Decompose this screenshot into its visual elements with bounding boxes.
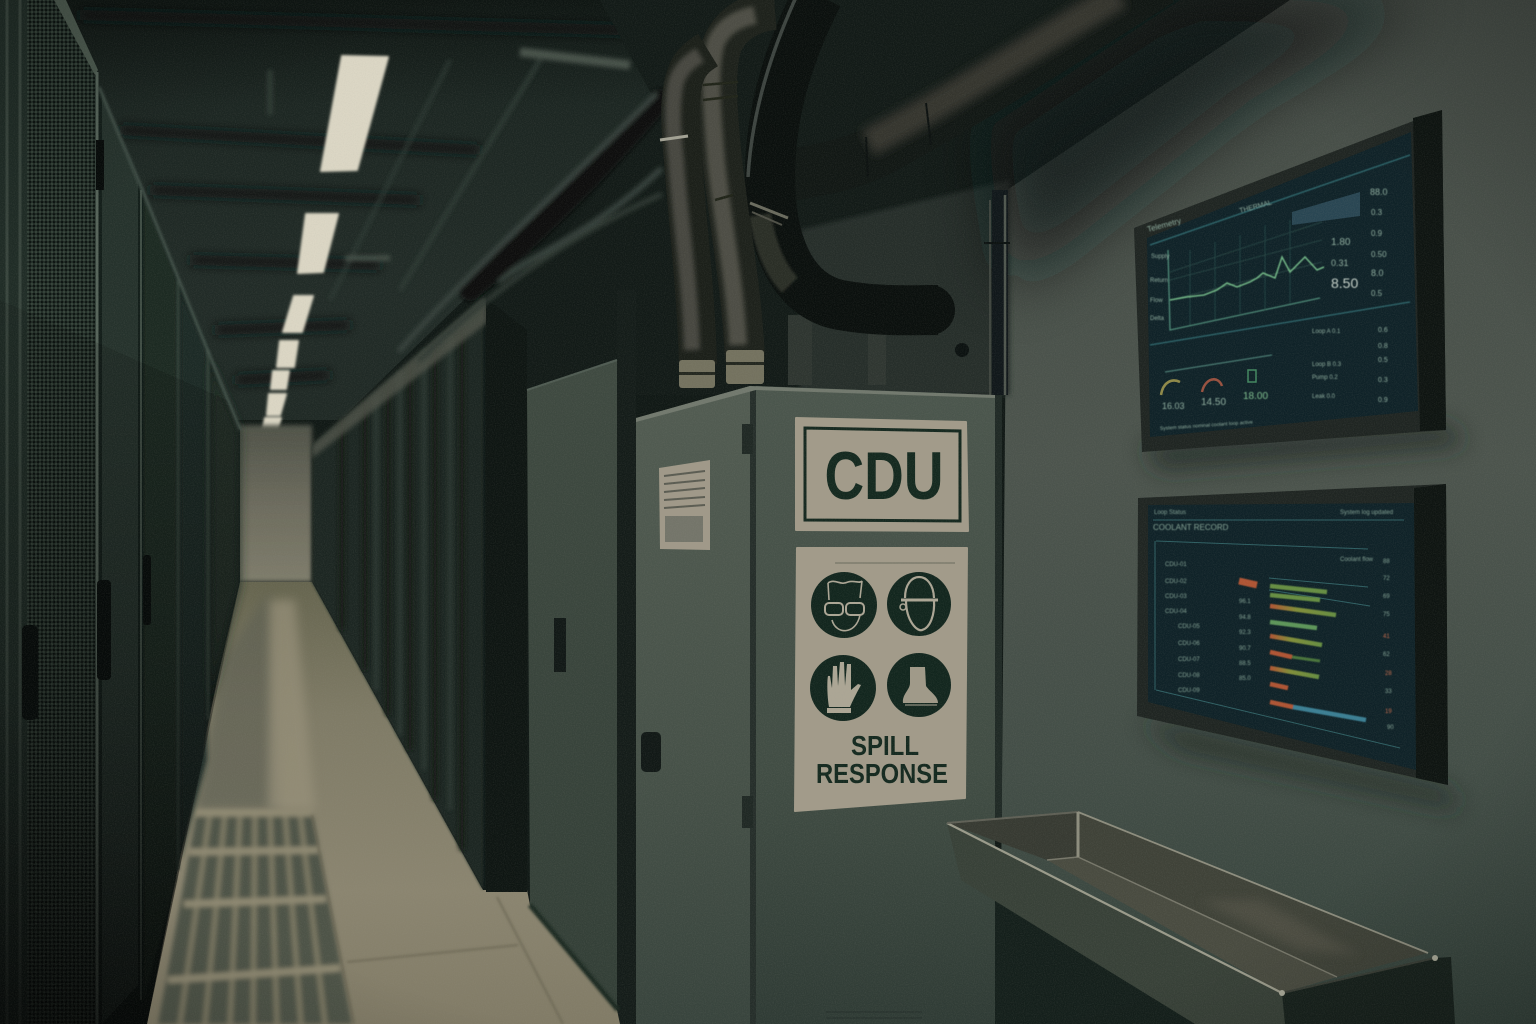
dashboard text: 1.80	[1331, 237, 1351, 248]
status list text: 72	[1383, 576, 1390, 582]
dashboard text: Flow	[1150, 298, 1163, 304]
dashboard text: 0.6	[1378, 327, 1388, 334]
dashboard text	[1146, 187, 1388, 432]
floor	[145, 582, 622, 1024]
status list text: 90	[1387, 725, 1394, 731]
dashboard text: 18.00	[1243, 391, 1268, 402]
status list text: CDU-05	[1178, 624, 1200, 630]
pipe metal couplings	[679, 350, 764, 388]
dashboard text: Telemetry	[1146, 216, 1182, 234]
dashboard text: 14.50	[1201, 397, 1226, 408]
left server racks	[0, 0, 240, 1024]
spill response sign: RESPONSE	[816, 758, 948, 789]
steel drip trough	[947, 812, 1455, 1024]
status list text: CDU-07	[1178, 657, 1200, 663]
dashboard text: 8.50	[1331, 275, 1358, 291]
status list text: 41	[1383, 634, 1390, 640]
dashboard text: Supply	[1151, 254, 1169, 260]
status list text: 85.0	[1239, 676, 1251, 682]
status list text: 88	[1383, 559, 1390, 565]
status list text: 69	[1383, 594, 1390, 600]
CDU sign	[796, 418, 968, 531]
monitor: loop status list	[1137, 484, 1448, 785]
ceiling	[57, 0, 800, 420]
status list text: 90.7	[1239, 646, 1251, 652]
cabinet: second CDU enclosure	[527, 290, 636, 1024]
monitor: telemetry dashboard	[1134, 110, 1446, 452]
dashboard text: System status nominal coolant loop active	[1160, 419, 1253, 432]
dashboard text: 0.8	[1378, 343, 1388, 350]
dashboard text: 8.0	[1371, 268, 1384, 278]
status list text: 33	[1385, 689, 1392, 695]
status list text: COOLANT RECORD	[1153, 523, 1229, 532]
dashboard text: 0.3	[1378, 377, 1388, 384]
spill response sign: SPILL	[851, 730, 919, 761]
gauges	[1161, 370, 1256, 395]
dashboard text: 0.31	[1331, 258, 1349, 268]
rack door handles	[22, 140, 151, 720]
status list text: CDU-06	[1178, 641, 1200, 647]
dashboard text: Loop B 0.3	[1312, 362, 1342, 368]
status list text: 75	[1383, 612, 1390, 618]
status list text: 96.1	[1239, 599, 1251, 605]
CDU sign: CDU	[824, 438, 944, 514]
dashboard text: Pump 0.2	[1312, 375, 1338, 381]
dashboard text: 16.03	[1162, 401, 1185, 411]
floor grate	[158, 812, 352, 1024]
icon: glove	[810, 655, 876, 721]
insulated coolant pipes	[660, 0, 1160, 365]
dashboard text: Leak 0.0	[1312, 394, 1336, 400]
upper dark duct zone behind pipes	[488, 0, 1290, 395]
chart: live trend line	[1150, 155, 1410, 372]
icon: safety goggles	[811, 572, 877, 638]
status list text: 88.5	[1239, 661, 1251, 667]
side label on cabinet	[659, 460, 710, 550]
status list text: 28	[1385, 671, 1392, 677]
status list text: CDU-04	[1165, 609, 1187, 615]
status list text: 19	[1385, 709, 1392, 715]
status list text: CDU-02	[1165, 579, 1187, 585]
far wall at end of aisle	[236, 425, 312, 582]
monitor shadows	[1140, 425, 1465, 810]
status list text: Coolant flow	[1340, 557, 1374, 563]
status list text: System log updated	[1340, 510, 1393, 516]
icon: face shield	[887, 572, 951, 636]
wall section behind conduit	[800, 180, 1010, 395]
dashboard text: Loop A 0.1	[1312, 329, 1341, 335]
status list text: CDU-08	[1178, 673, 1200, 679]
ceiling conduit pipes	[400, 95, 660, 360]
status list text: CDU-09	[1178, 688, 1200, 694]
dashboard dividers	[1153, 520, 1404, 748]
dashboard text: 0.5	[1378, 357, 1388, 364]
status list text: CDU-01	[1165, 562, 1187, 568]
dashboard text: Return	[1150, 278, 1168, 284]
status list text: 92.3	[1239, 630, 1251, 636]
status list text: CDU-03	[1165, 594, 1187, 600]
dashboard text: THERMAL	[1239, 199, 1273, 215]
wall	[1000, 0, 1536, 1024]
vertical conduit by wall	[800, 190, 1010, 395]
dashboard text: 0.9	[1371, 229, 1383, 238]
right server racks	[312, 296, 527, 892]
dashboard text: 0.3	[1371, 208, 1383, 217]
dashboard text: 88.0	[1370, 187, 1388, 197]
dashboard text: 0.9	[1378, 397, 1388, 404]
dashboard text: 0.5	[1371, 289, 1383, 298]
dashboard text: Delta	[1150, 316, 1165, 322]
spill response sign	[795, 548, 967, 811]
ceiling lights	[262, 56, 388, 434]
status list text: 94.8	[1239, 615, 1251, 621]
status bars	[1239, 581, 1366, 720]
icon: boot	[887, 653, 951, 717]
status list text	[1153, 510, 1394, 731]
status list text: Loop Status	[1154, 510, 1186, 516]
main CDU cabinet	[636, 386, 1002, 1024]
dashboard text: 0.50	[1371, 250, 1387, 259]
status list text: 62	[1383, 652, 1390, 658]
pipe shadow on wall	[985, 0, 1420, 290]
